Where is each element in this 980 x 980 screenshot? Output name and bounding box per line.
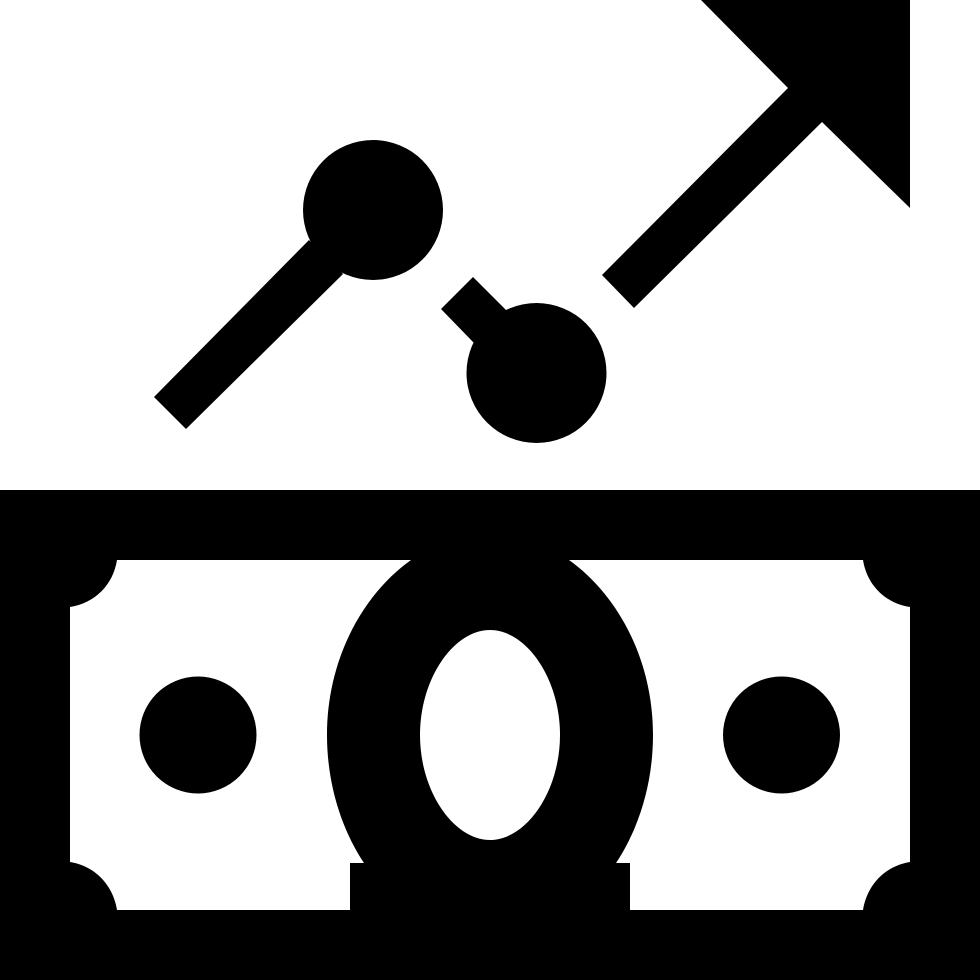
banknote: right dot <box>723 676 840 794</box>
chart point: lower node with line <box>441 277 606 443</box>
banknote: centre oval <box>420 630 560 840</box>
banknote: left white panel <box>70 560 411 910</box>
chart point: upper node with line <box>154 140 443 429</box>
banknote: left dot <box>140 676 256 794</box>
icon: growth chart with arrow <box>154 0 910 443</box>
icon: banknote <box>0 490 980 980</box>
arrow: rising arrow head and shaft <box>602 0 910 308</box>
banknote: outer frame <box>0 490 980 980</box>
banknote: right white panel <box>569 560 910 910</box>
